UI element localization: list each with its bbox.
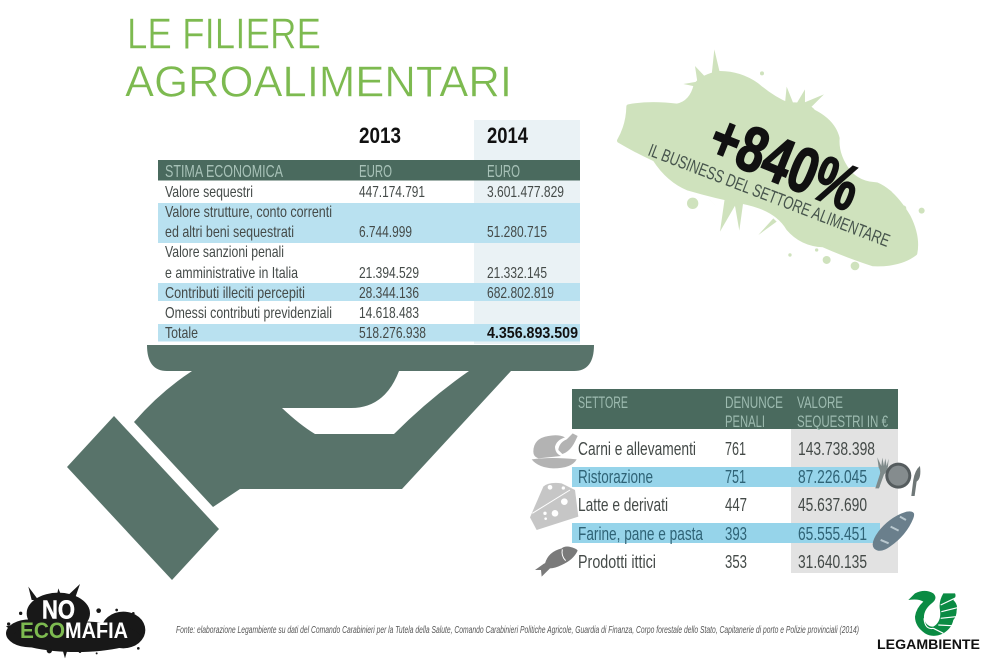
icon: green swan	[908, 591, 957, 636]
row: farine	[572, 523, 880, 544]
logo: No Ecomafia	[6, 584, 145, 658]
logo wordmark: NO	[42, 594, 75, 624]
row: latte: 447	[725, 495, 747, 515]
table header: PENALI	[725, 412, 765, 431]
row: valore sequestri: 3.601.477.829	[487, 184, 564, 201]
row: valore sanzioni: 21.394.529	[359, 265, 419, 282]
row: totale: 518.276.938	[359, 325, 426, 342]
row: valore sequestri: 447.174.791	[359, 184, 425, 201]
row: valore sequestri	[165, 184, 564, 201]
row: prodotti ittici: 353	[725, 552, 747, 572]
cuff	[67, 416, 219, 580]
row: omessi contributi: Omessi contributi previdenziali	[165, 305, 332, 322]
row: omessi contributi: 14.618.483	[359, 305, 419, 322]
row: farine: 393	[725, 524, 747, 544]
row: ristorazione: 87.226.045	[798, 467, 867, 487]
row: prodotti ittici: Prodotti ittici	[578, 552, 656, 572]
row: contributi illeciti: Contributi illeciti percepiti	[165, 285, 305, 302]
icon: hand holding tray	[67, 345, 594, 580]
table header	[572, 389, 898, 431]
row: latte: 45.637.690	[798, 495, 867, 515]
row: ristorazione: Ristorazione	[578, 467, 653, 487]
icon: cutlery and plate	[875, 457, 920, 496]
title: LE FILIERE	[127, 10, 321, 58]
logo: Legambiente	[877, 591, 980, 652]
row: carni: Carni e allevamenti	[578, 439, 696, 459]
row: valore sequestri: Valore sequestri	[165, 184, 253, 201]
row: carni: 143.738.398	[798, 439, 875, 459]
row: valore sanzioni: 21.332.145	[487, 265, 547, 282]
table: settori	[530, 389, 920, 577]
row: latte: Latte e derivati	[578, 495, 668, 515]
row: totale: Totale	[165, 325, 198, 342]
row: totale: 4.356.893.509	[487, 325, 578, 342]
icon: fish	[535, 547, 578, 577]
table header: STIMA ECONOMICA	[165, 161, 283, 181]
icon: roast chicken	[532, 433, 578, 468]
row: valore strutture: ed altri beni sequestrati	[165, 224, 294, 241]
row: ristorazione	[572, 467, 880, 487]
logo wordmark: LEGAMBIENTE	[877, 636, 980, 652]
row: valore sanzioni	[165, 244, 547, 282]
year headings	[359, 123, 529, 148]
row: farine: Farine, pane e pasta	[578, 524, 704, 544]
row: valore sanzioni: Valore sanzioni penali	[165, 244, 284, 261]
big percentage: +840%	[700, 100, 870, 225]
logo wordmark: MAFIA	[65, 618, 128, 643]
table: stima economica	[158, 120, 580, 344]
title: AGROALIMENTARI	[125, 58, 512, 106]
row: valore strutture: 51.280.715	[487, 224, 547, 241]
row: contributi illeciti: 28.344.136	[359, 285, 419, 302]
row: valore strutture: 6.744.999	[359, 224, 412, 241]
table header: EURO	[487, 161, 520, 181]
row: totale	[158, 324, 580, 342]
icon: cheese	[530, 483, 578, 530]
black ink splat	[6, 584, 145, 658]
table header: EURO	[359, 161, 392, 181]
table header: SEQUESTRI IN €	[797, 412, 888, 431]
row: carni	[578, 439, 875, 459]
table header	[158, 160, 580, 181]
row: ristorazione: 751	[725, 467, 746, 487]
row: valore strutture: Valore strutture, conto correnti	[165, 204, 332, 221]
title	[125, 10, 512, 106]
table header: SETTORE	[578, 393, 628, 412]
table header: VALORE	[797, 393, 843, 412]
row: valore strutture	[158, 203, 580, 243]
row: carni: 761	[725, 439, 746, 459]
splat caption: IL BUSINESS DEL SETTORE ALIMENTARE	[646, 140, 893, 251]
row: contributi illeciti	[158, 283, 580, 302]
row: valore sanzioni: e amministrative in Italia	[165, 265, 298, 282]
logo wordmark	[20, 594, 128, 643]
splat callout: +840%	[619, 49, 925, 270]
row: prodotti ittici	[578, 552, 867, 572]
row: latte	[578, 495, 867, 515]
year headings: 2014	[487, 123, 529, 148]
hand	[134, 371, 511, 507]
year headings: 2013	[359, 123, 401, 148]
green paint splat	[619, 49, 925, 270]
tray	[147, 345, 594, 371]
row: prodotti ittici: 31.640.135	[798, 552, 867, 572]
logo wordmark: ECO	[20, 618, 65, 643]
sequestri column background	[791, 429, 898, 573]
table header: DENUNCE	[725, 393, 783, 412]
2014 column highlight	[474, 120, 580, 344]
row: farine: 65.555.451	[798, 524, 867, 544]
row: contributi illeciti: 682.802.819	[487, 285, 554, 302]
icon: bread	[873, 511, 914, 551]
